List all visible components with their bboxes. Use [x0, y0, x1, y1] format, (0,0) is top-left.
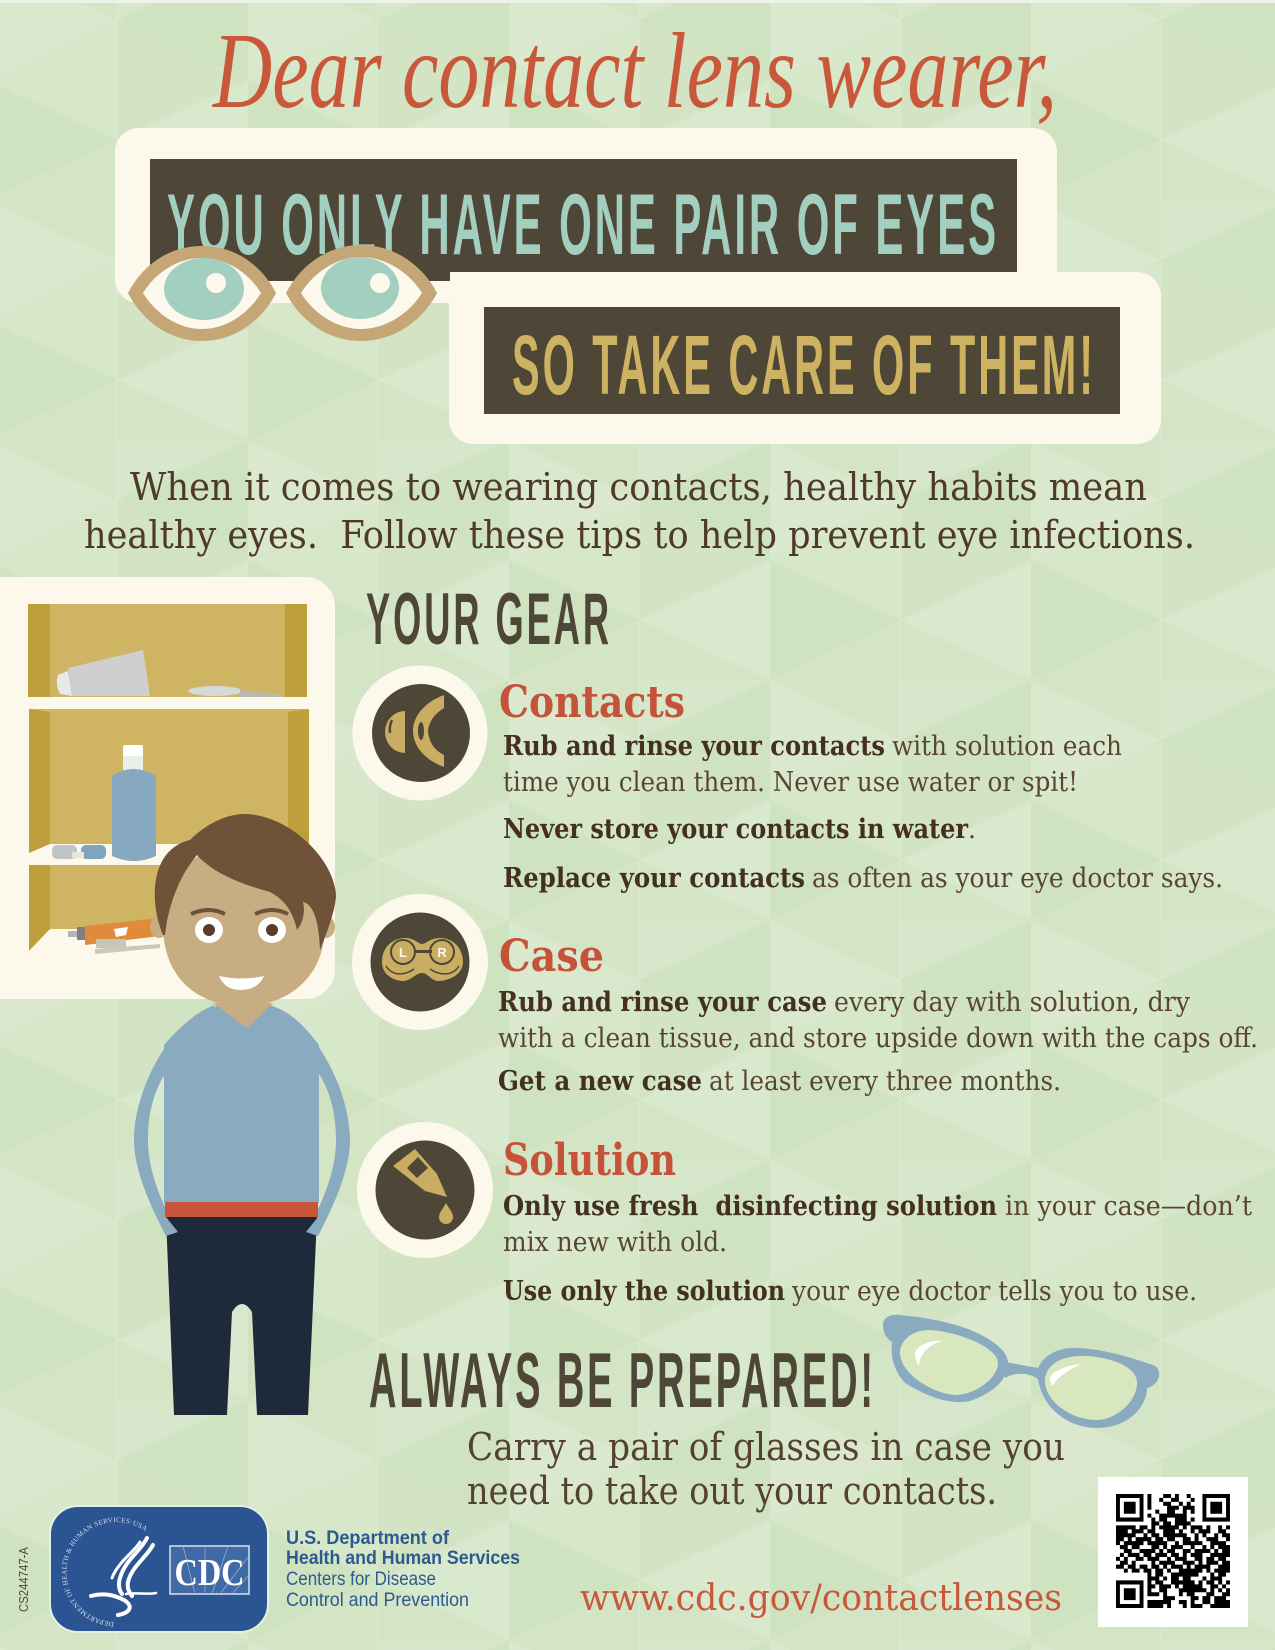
- section: case: Rub and rinse your case: [498, 987, 827, 1018]
- department text: U.S. Department of: [286, 1528, 450, 1549]
- document id: CS244747-A: [16, 1547, 31, 1612]
- text: YOUR GEAR: [366, 579, 612, 660]
- icon: glasses: [883, 1315, 1159, 1428]
- seal text: DEPARTMENT OF HEALTH & HUMAN SERVICES·USA: [62, 1518, 146, 1627]
- icon: contacts: [352, 666, 488, 800]
- tweezers: [188, 686, 283, 697]
- toothpaste and brush: [68, 918, 160, 954]
- section: case: Case: [499, 931, 604, 982]
- hair: [155, 814, 336, 950]
- icon: pair of eyes: [128, 245, 437, 341]
- department text: Health and Human Services: [286, 1548, 520, 1569]
- section: case: [498, 931, 1258, 1097]
- icon: case: R: [437, 945, 447, 960]
- section: solution: Use only the solution: [503, 1276, 785, 1307]
- banner: you only have one pair of eyes: [115, 128, 1057, 303]
- section: contacts: Replace your contacts: [503, 863, 805, 894]
- url: www.cdc.gov/contactlenses: [580, 1578, 1062, 1619]
- section: solution: in your case—don’t: [1005, 1191, 1252, 1222]
- eyes: [195, 917, 286, 943]
- cdc box: CDC: [174, 1552, 244, 1594]
- solution bottle: [112, 745, 156, 861]
- department text: Control and Prevention: [286, 1590, 469, 1611]
- person: [134, 814, 350, 1415]
- section: case: every day with solution, dry: [834, 987, 1191, 1018]
- department text: [286, 1528, 520, 1611]
- brows: [191, 910, 288, 914]
- eagle: [91, 1538, 156, 1615]
- icon: case: [352, 894, 488, 1030]
- section: contacts: .: [968, 814, 976, 845]
- section: solution: Solution: [503, 1135, 676, 1186]
- always prepared text: need to take out your contacts.: [467, 1469, 997, 1513]
- cdc logo: [49, 1505, 269, 1633]
- department text: Centers for Disease: [286, 1569, 436, 1590]
- banner: so take care of them: [449, 272, 1161, 444]
- section: contacts: as often as your eye doctor says.: [812, 863, 1223, 894]
- head: [163, 845, 325, 1006]
- icon: case: L: [399, 945, 407, 960]
- pants: [166, 1217, 317, 1415]
- qr code: [1098, 1477, 1248, 1627]
- section: solution: your eye doctor tells you to use.: [791, 1276, 1197, 1307]
- torso: [164, 1003, 319, 1203]
- cabinet shelves: [28, 604, 309, 951]
- lens case: [52, 845, 106, 859]
- section: contacts: time you clean them. Never use water or spit!: [503, 767, 1078, 798]
- intro text: [84, 465, 1195, 557]
- section: solution: Only use fresh disinfecting solution: [503, 1191, 997, 1222]
- smile: [219, 976, 264, 990]
- section: contacts: Never store your contacts in water: [503, 814, 969, 845]
- belt: [165, 1202, 318, 1217]
- section: case: at least every three months.: [709, 1066, 1061, 1097]
- section: solution: [503, 1135, 1252, 1307]
- section: contacts: Contacts: [499, 677, 685, 728]
- section: case: Get a new case: [498, 1066, 702, 1097]
- panel: medicine cabinet: [0, 577, 335, 999]
- arms: [134, 1005, 350, 1236]
- tube: [57, 650, 150, 696]
- intro text: When it comes to wearing contacts, healthy habits mean: [130, 465, 1147, 509]
- section: contacts: with solution each: [892, 731, 1122, 762]
- section: solution: mix new with old.: [503, 1227, 727, 1258]
- always prepared text: [467, 1425, 1065, 1513]
- intro text: healthy eyes. Follow these tips to help prevent eye infections.: [84, 513, 1195, 557]
- hand cuffs: [166, 1217, 318, 1236]
- icon: solution: [357, 1122, 493, 1258]
- always prepared text: Carry a pair of glasses in case you: [467, 1425, 1065, 1469]
- section: contacts: Rub and rinse your contacts: [503, 731, 885, 762]
- section: contacts: [499, 677, 1223, 894]
- neck: [213, 1003, 273, 1028]
- ears: [150, 916, 335, 938]
